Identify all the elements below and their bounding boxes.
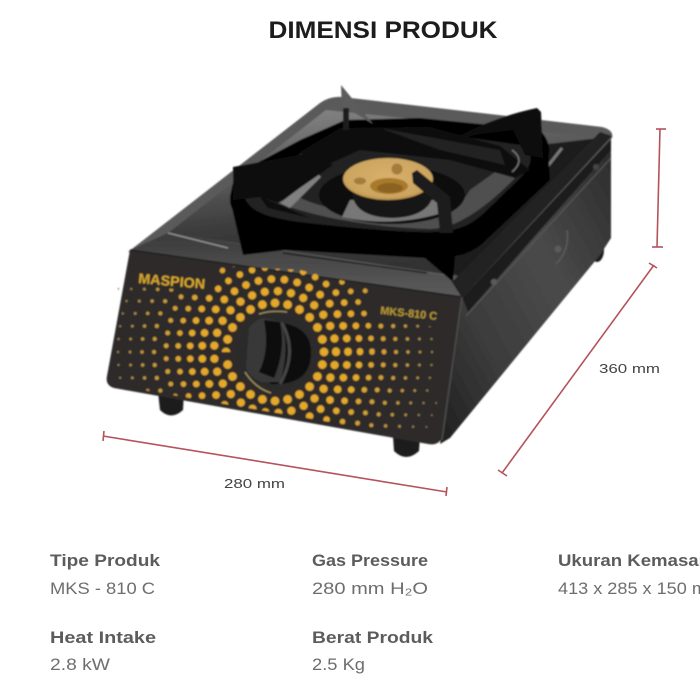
spec: heat intake: Heat Intake [50,628,156,647]
title: DIMENSI PRODUK [268,17,498,44]
spec: heat intake [50,628,156,674]
grate shadow [232,150,550,282]
stove top surface [128,97,612,298]
dimension line: height [652,129,666,247]
spec: ukuran kemasan [558,551,700,598]
spec: ukuran kemasan: Ukuran Kemasan [558,551,700,570]
dimension line: width [103,431,447,496]
pan supports [233,85,543,233]
dimension line: depth [498,263,657,476]
spec: berat produk: 2.5 Kg [312,655,365,674]
spec: gas pressure: 280 mm H₂O [312,579,428,598]
spec: gas pressure [312,551,428,598]
spec: berat produk: Berat Produk [312,628,434,647]
spec: heat intake: 2.8 kW [50,655,110,674]
spec: tipe produk: MKS - 810 C [50,579,155,598]
model label: MKS-810 C [380,305,438,323]
depth label: 360 mm [599,361,660,376]
stove side panel [440,133,611,444]
spec: berat produk [312,628,434,674]
width label: 280 mm [224,476,285,491]
spec: tipe produk [50,551,161,598]
gas stove illustration [106,84,614,458]
burner bowl and ring [230,118,549,244]
halftone dot pattern [116,265,438,429]
stove front panel [107,250,462,444]
control knob [237,311,313,393]
burner head [319,158,465,224]
spec: tipe produk: Tipe Produk [50,551,161,570]
brand label: MASPION [138,270,206,292]
spec: gas pressure: Gas Pressure [312,551,428,570]
stove feet [158,238,604,457]
